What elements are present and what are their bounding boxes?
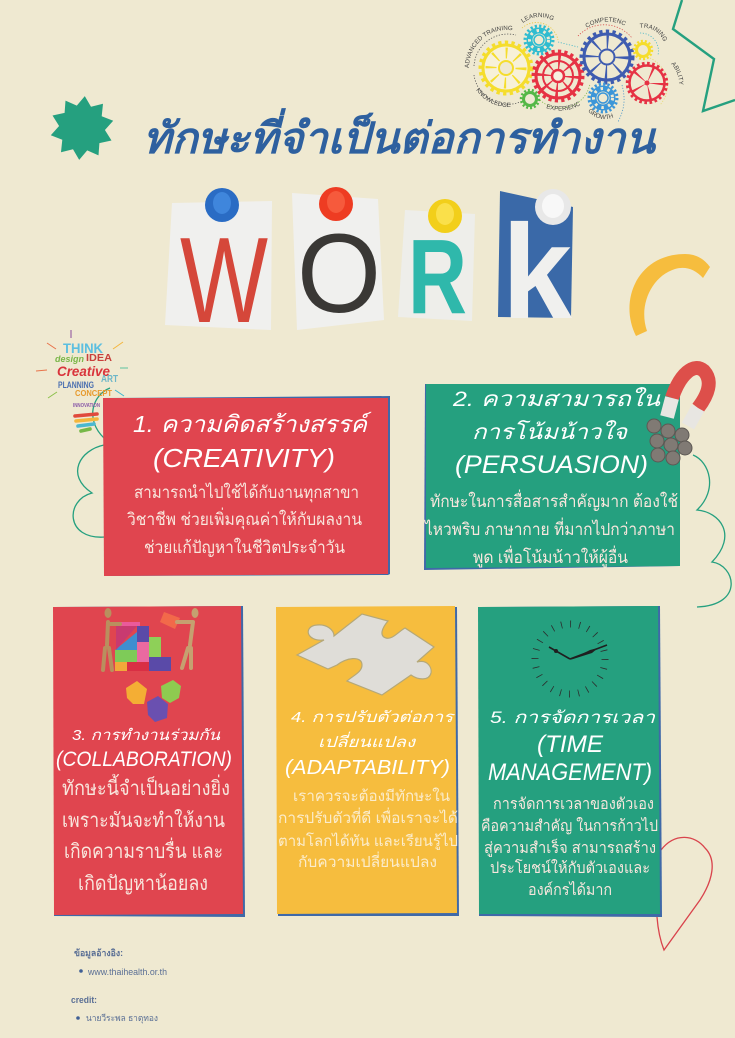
heading: 4. การปรับตัวต่อการ bbox=[291, 709, 455, 726]
dotted connector arcs bbox=[474, 23, 667, 122]
letter W bbox=[165, 188, 272, 348]
reference source bbox=[74, 948, 167, 977]
heading: เปลี่ยนแปลง bbox=[318, 731, 417, 751]
heading: (PERSUASION) bbox=[455, 451, 648, 479]
gear labels: KNOWLEDGE bbox=[476, 88, 510, 107]
text block: เกิดปัญหาน้อยลง bbox=[78, 873, 208, 895]
text block: การจัดการเวลาของตัวเอง bbox=[493, 796, 654, 813]
gear labels bbox=[464, 12, 684, 120]
letter K: k bbox=[502, 198, 572, 347]
panel: persuasion bbox=[423, 384, 680, 570]
bulb rays bbox=[36, 330, 128, 398]
text block bbox=[481, 796, 658, 899]
title: ทักษะที่จำเป็นต่อการทำงาน bbox=[143, 108, 657, 163]
bulb words: Creative bbox=[57, 363, 110, 379]
heading: 5. การจัดการเวลา bbox=[490, 708, 656, 727]
steel balls bbox=[647, 419, 692, 465]
heading: 1. ความคิดสร้างสรรค์ bbox=[133, 411, 372, 437]
icon: clock bbox=[535, 624, 607, 694]
left wooden figure bbox=[103, 608, 120, 670]
bulb words: IDEA bbox=[86, 353, 112, 364]
WORK paper letters bbox=[165, 187, 573, 348]
bulb words: CONCEPT bbox=[75, 389, 112, 398]
bulb words: design bbox=[55, 354, 85, 364]
small blue gear bbox=[589, 84, 617, 112]
red center gear bbox=[534, 52, 582, 100]
text block: ไหวพริบ ภาษากาย ที่มากไปกว่าภาษา bbox=[423, 517, 675, 539]
icon: creative lightbulb bbox=[36, 330, 128, 431]
decoration: red heart outline bbox=[657, 837, 712, 950]
text block: ทักษะนี้จำเป็นอย่างยิ่ง bbox=[62, 774, 230, 800]
text block: ตามโลกได้ทัน และเรียนรู้ไป bbox=[278, 832, 458, 850]
gear labels: ABILITY bbox=[671, 62, 684, 85]
text block: คือความสำคัญ ในการก้าวไป bbox=[481, 817, 658, 835]
yellow gear bbox=[480, 42, 532, 94]
bulb words bbox=[55, 340, 118, 409]
heading: 2. ความสามารถใน bbox=[452, 387, 661, 411]
text block: เราควรจะต้องมีทักษะใน bbox=[293, 787, 450, 805]
text block: ประโยชน์ให้กับตัวเองและ bbox=[490, 859, 650, 877]
heading bbox=[452, 387, 661, 479]
panel: collaboration bbox=[53, 606, 245, 917]
gear labels: GROWTH bbox=[588, 109, 614, 120]
panel: creativity bbox=[103, 396, 390, 576]
text block bbox=[62, 774, 230, 895]
panel: adaptability bbox=[276, 606, 459, 916]
icon: gears cluster bbox=[464, 12, 684, 122]
bulb words: PLANNING bbox=[58, 380, 94, 390]
text block: วิชาชีพ ช่วยเพิ่มคุณค่าให้กับผลงาน bbox=[127, 507, 362, 530]
bulb words: ART bbox=[101, 374, 118, 385]
reference source: ข้อมูลอ้างอิง: bbox=[74, 948, 123, 959]
gear labels: TRAINING bbox=[640, 23, 667, 42]
heading: (ADAPTABILITY) bbox=[285, 757, 450, 779]
text block: สู่ความสำเร็จ สามารถสร้าง bbox=[484, 838, 656, 858]
heading bbox=[488, 708, 656, 786]
heading: การโน้มน้าวใจ bbox=[472, 420, 629, 444]
text block: เกิดความราบรื่น และ bbox=[64, 837, 223, 863]
heading: (COLLABORATION) bbox=[56, 748, 232, 771]
credit: credit: bbox=[71, 995, 97, 1005]
icon: magnet with steel balls bbox=[647, 368, 709, 465]
bulb words: INNOVATION bbox=[73, 403, 100, 409]
green gear bbox=[521, 90, 539, 108]
letter O: O bbox=[297, 211, 381, 336]
icon: puzzle piece bbox=[297, 614, 434, 695]
reference source: www.thaihealth.or.th bbox=[87, 967, 167, 977]
text block: พูด เพื่อโน้มน้าวให้ผู้อื่น bbox=[473, 545, 628, 568]
loose cubes bbox=[126, 680, 181, 722]
decoration: green squiggle right bbox=[693, 455, 731, 607]
text block: องค์กรได้มาก bbox=[528, 881, 612, 899]
right red gear bbox=[628, 64, 666, 102]
heading: 3. การทำงานร่วมกัน bbox=[72, 727, 221, 744]
letter R bbox=[398, 199, 475, 336]
heading bbox=[133, 411, 372, 473]
heading: (TIME bbox=[537, 731, 604, 758]
gear labels: LEARNING bbox=[520, 12, 554, 23]
letter W: W bbox=[180, 212, 268, 348]
decoration: yellow arc bbox=[629, 254, 710, 336]
text block: ช่วยแก้ปัญหาในชีวิตประจำวัน bbox=[144, 537, 345, 557]
small yellow gear bbox=[634, 41, 652, 59]
cyan gear bbox=[525, 26, 553, 54]
footer references bbox=[71, 948, 167, 1024]
letter R: R bbox=[408, 218, 467, 336]
text block: กับความเปลี่ยนแปลง bbox=[298, 851, 437, 871]
credit: นายวีระพล ธาตุทอง bbox=[86, 1013, 158, 1024]
text block: ทักษะในการสื่อสารสำคัญมาก ต้องใช้ bbox=[430, 489, 678, 511]
bulb base stripes bbox=[75, 414, 97, 431]
blue gear bbox=[582, 32, 632, 82]
heading: (CREATIVITY) bbox=[153, 443, 335, 473]
panel: time management bbox=[478, 606, 662, 917]
text block: เพราะมันจะทำให้งาน bbox=[62, 809, 225, 832]
decoration: green star outline top right bbox=[673, 0, 735, 111]
text block: สามารถนำไปใช้ได้กับงานทุกสาขา bbox=[134, 482, 359, 503]
heading bbox=[285, 709, 455, 779]
credit bbox=[71, 995, 158, 1024]
heading bbox=[56, 727, 232, 771]
gear labels: ADVANCED TRAINING bbox=[464, 26, 512, 68]
right wooden figure bbox=[177, 608, 198, 668]
icon: blocks and wooden figures bbox=[103, 608, 198, 722]
bulb words: THINK bbox=[63, 340, 103, 356]
decoration: green squiggle left bbox=[73, 388, 110, 537]
text block bbox=[278, 787, 458, 871]
heading: MANAGEMENT) bbox=[488, 759, 652, 786]
text block bbox=[423, 489, 678, 568]
icon: green starburst bbox=[51, 96, 113, 160]
text block bbox=[127, 482, 362, 557]
text block: การปรับตัวที่ดี เพื่อเราจะได้ bbox=[278, 807, 458, 827]
